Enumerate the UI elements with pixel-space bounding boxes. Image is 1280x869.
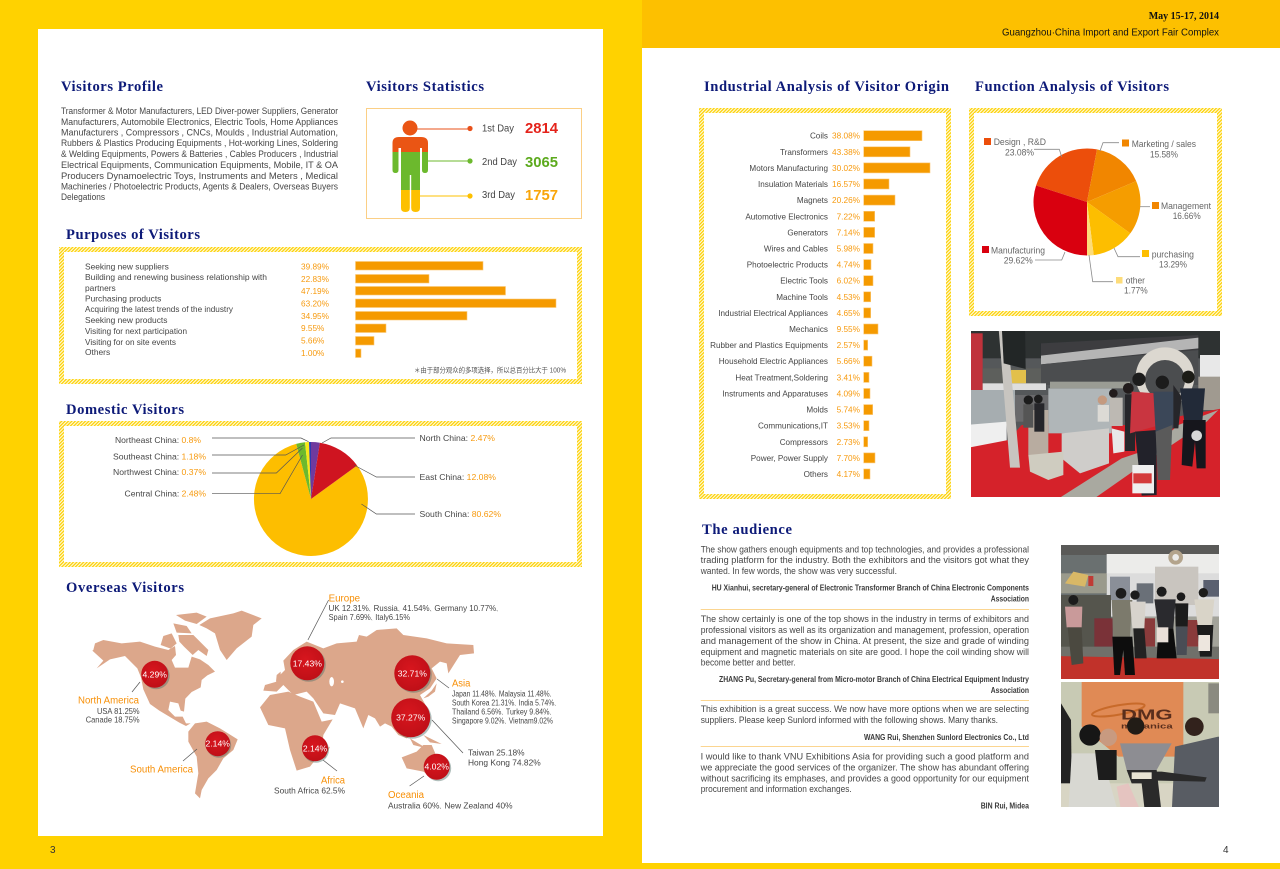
text block: visitors profile: Rubbers & Plastics Producing Equipments , Hot-working Lines, Soldering [61, 138, 338, 148]
panel: domestic visitors [62, 424, 580, 564]
testimonial: WANG Rui: WANG Rui, Shenzhen Sunlord Electronics Co., Ltd [864, 732, 1029, 742]
testimonial: BIN Rui: I would like to thank VNU Exhibitions Asia for providing such a good platform and [701, 752, 1029, 762]
text block: visitors profile: & Welding Equipments, Powers & Batteries , Cables Producers , Industrial [61, 149, 338, 159]
purpose labels: Seeking new products [85, 315, 167, 325]
industry percentages: 4.74% [837, 261, 861, 270]
day 2 row [428, 154, 558, 171]
purpose labels: partners [85, 283, 116, 293]
text block: visitors profile [61, 106, 338, 202]
day 1 row [417, 120, 559, 137]
label: North America: North America [78, 696, 139, 706]
label: Europe: Spain 7.69%、Italy6.15% [329, 612, 411, 622]
industry labels: Instruments and Apparatuses [722, 390, 828, 398]
industry labels: Magnets [797, 196, 828, 205]
legend: Marketing sales: 15.58% [1150, 149, 1178, 159]
day 1 row: 2814 [525, 120, 559, 137]
photo: DMG mecanica meeting [1061, 682, 1219, 807]
testimonial: BIN Rui: we appreciate the good services of the organizer. The show has abundant offering [700, 762, 1029, 772]
heading: Domestic Visitors: Domestic Visitors [66, 402, 184, 418]
testimonial: ZHANG Pu: Association [991, 685, 1029, 695]
purpose percentages: 1.00% [301, 349, 325, 358]
testimonial: BIN Rui: procurement and information exchanges. [701, 784, 852, 794]
label: Asia: Thailand 6.56%、Turkey 9.84%、 [452, 707, 554, 716]
legend: Management [1152, 201, 1211, 221]
industry percentages: 20.26% [832, 196, 861, 205]
legend: Design R&D [984, 137, 1046, 157]
industry percentages: 43.38% [832, 148, 861, 157]
legend: Management: 16.66% [1173, 211, 1201, 221]
legend: other: other [1126, 275, 1145, 285]
testimonial: BIN Rui [700, 752, 1029, 811]
right page header band: May 15-17, 2014 [1149, 11, 1219, 22]
testimonial: BIN Rui: without sacrificing its emphases, and provides a good opportunity for our equipment [700, 773, 1029, 783]
testimonial: WANG Rui: This exhibition is a great success. We now have more options when we are selecting [701, 704, 1029, 714]
domestic labels: Southeast China: 1.18% [113, 452, 207, 462]
right page background [642, 0, 1280, 869]
purpose labels: Acquiring the latest trends of the industry [85, 304, 234, 314]
industry labels: Communications,IT [758, 422, 828, 431]
legend: Manufacturing [982, 245, 1045, 265]
legend: Design R&D: Design , R&D [994, 137, 1046, 147]
purpose percentages: 47.19% [301, 287, 330, 296]
domestic labels [113, 433, 502, 519]
day 3 row [420, 187, 558, 204]
purpose labels [85, 262, 267, 357]
industry percentages: 7.70% [837, 454, 861, 463]
right page header band [642, 0, 1280, 48]
purpose percentages: 34.95% [301, 312, 330, 321]
testimonial: ZHANG Pu: equipment and magnetic materials on site are good. I hope the coil winding show will [701, 647, 1029, 657]
industry labels [710, 132, 829, 479]
footnote: ＊由于部分观众的多项选择，所以总百分比大于 100% [414, 366, 566, 374]
text block: visitors profile: Machineries / Photoelectric Products, Agents & Dealers, Overseas Buyers [61, 182, 338, 192]
industry labels: Rubber and Plastics Equipments [710, 341, 828, 350]
industry labels: Compressors [780, 438, 828, 447]
photo: DMG mecanica meeting: mecanica [1121, 722, 1174, 731]
label: South America: South America [130, 764, 193, 776]
industry labels: Household Electric Appliances [719, 357, 828, 366]
domestic labels: Northeast China: 0.8% [115, 435, 202, 445]
industry percentages: 5.98% [837, 244, 861, 254]
label: Africa: South Africa 62.5% [274, 786, 346, 796]
map bubble: Oceania [424, 754, 451, 781]
label: Europe: UK 12.31%、Russia、41.54%、Germany 10.77%、 [329, 603, 501, 613]
label: North America: USA 81.25% [97, 706, 140, 716]
testimonial: HU Xianhui: Association [991, 593, 1029, 603]
leader lines: domestic [212, 438, 415, 514]
text block: visitors profile: Producers Dynamoelectric Toys, Instruments and Meters , Medical [61, 171, 338, 181]
industry percentages: 38.08% [832, 132, 861, 141]
industry percentages: 5.74% [837, 406, 861, 415]
domestic labels: Northwest China: 0.37% [113, 467, 207, 477]
industry percentages: 3.53% [837, 422, 861, 431]
testimonial: WANG Rui [701, 704, 1029, 746]
legend: Manufacturing: Manufacturing [991, 245, 1045, 255]
world map [92, 611, 474, 798]
industry labels: Motors Manufacturing [749, 164, 828, 173]
purpose labels: Purchasing products [85, 294, 161, 304]
panel: function analysis [972, 110, 1220, 314]
industry labels: Transformers [780, 148, 828, 157]
heading: Industrial Analysis of Visitor Origin: Industrial Analysis of Visitor Origin [704, 79, 949, 95]
text block: visitors profile: Manufacturers , Compressors , CNCs, Moulds , Industrial Automation, [61, 128, 338, 138]
heading: Purposes of Visitors: Purposes of Visitors [66, 227, 200, 243]
purpose percentages: 5.66% [301, 337, 325, 346]
domestic labels: Central China: 2.48% [124, 488, 207, 498]
label: Taiwan and Hong Kong [468, 747, 541, 767]
page number 3: 3 [50, 845, 56, 856]
map bubble: Europe: 17.43% [293, 658, 322, 668]
purpose labels: Visiting for on site events [85, 337, 176, 347]
industry labels: Heat Treatment,Soldering [735, 373, 828, 382]
industry labels: Photoelectric Products [747, 261, 828, 270]
legend: other [1116, 275, 1148, 295]
legend: purchasing: purchasing [1152, 249, 1194, 259]
industry percentages [832, 132, 861, 479]
panel: purposes of visitors [62, 250, 580, 382]
industry labels: Generators [787, 228, 828, 237]
label: Asia: Japan 11.48%、Malaysia 11.48%、 [452, 689, 554, 698]
testimonial: ZHANG Pu: The show certainly is one of the top shows in the industry in terms of exhibitors and [701, 614, 1029, 624]
map bubble: Asia north: 32.71% [398, 668, 427, 678]
heading: Visitors Statistics: Visitors Statistics [366, 79, 484, 95]
page number 4: 4 [1223, 845, 1229, 856]
industry percentages: 7.14% [837, 228, 861, 237]
label: Africa: Africa [321, 776, 345, 786]
map bubble: North America [141, 661, 170, 689]
label: Taiwan and Hong Kong: Hong Kong 74.82% [468, 757, 541, 767]
photo: exhibition booth with visitors [971, 331, 1220, 497]
heading: Function Analysis of Visitors: Function Analysis of Visitors [975, 79, 1169, 95]
industry percentages: 9.55% [837, 325, 861, 334]
label: Oceania: Oceania [388, 790, 424, 801]
testimonial: HU Xianhui: HU Xianhui, secretary-general of Electronic Transformer Branch of China Electronic Components [712, 583, 1029, 593]
industry percentages: 16.57% [832, 180, 861, 189]
purpose labels: Visiting for next participation [85, 326, 187, 336]
label: Asia: Singapore 9.02%、Vietnam9.02% [452, 716, 553, 725]
purpose percentages: 22.83% [301, 275, 330, 284]
bar chart: industries [864, 131, 930, 479]
heading: Visitors Profile: Visitors Profile [61, 79, 164, 95]
legend: Marketing sales [1122, 139, 1196, 159]
label: Taiwan and Hong Kong: Taiwan 25.18% [468, 747, 525, 757]
leader lines: functions [1034, 143, 1150, 282]
testimonial: HU Xianhui [700, 545, 1029, 610]
industry labels: Automotive Electronics [745, 212, 828, 221]
map bubble: South America [205, 731, 231, 758]
label: Asia: South Korea 21.31%、India 5.74%、 [452, 698, 559, 707]
industry labels: Wires and Cables [764, 244, 828, 254]
industry percentages: 4.17% [837, 470, 861, 479]
label: Europe: Europe [329, 594, 361, 604]
map leader lines [132, 600, 463, 786]
industry labels: Molds [806, 406, 828, 415]
industry labels: Power, Power Supply [751, 454, 829, 463]
panel: visitors statistics [366, 108, 582, 218]
industry labels: Coils [810, 132, 828, 141]
legend: purchasing [1142, 249, 1194, 269]
domestic labels: South China: 80.62% [420, 509, 502, 519]
label: Asia [452, 678, 559, 725]
industry percentages: 7.22% [837, 212, 861, 221]
text block: visitors profile: Electrical Equipments, Communication Equipments, Mobile, IT & OA [61, 160, 338, 170]
purpose labels: Seeking new suppliers [85, 262, 169, 272]
label: Asia: Asia [452, 678, 471, 690]
testimonial: ZHANG Pu: professional visitors as well as its organization and management, profession, operation [701, 625, 1029, 635]
label: Africa [274, 776, 346, 796]
domestic labels: North China: 2.47% [420, 433, 496, 443]
testimonial: BIN Rui: BIN Rui, Midea [981, 801, 1029, 811]
testimonial: ZHANG Pu: and management of the show in China. At present, the size and grade of winding [701, 636, 1029, 646]
industry labels: Insulation Materials [758, 180, 828, 189]
label: North America: Canade 18.75% [86, 715, 140, 725]
day 1 row: 1st Day [482, 124, 514, 134]
map bubble: North America: 4.29% [143, 669, 167, 679]
legend: Manufacturing: 29.62% [1004, 255, 1033, 265]
testimonial: ZHANG Pu: ZHANG Pu, Secretary-general from Micro-motor Branch of China Electrical Equipment Industry [719, 674, 1029, 684]
label: North America [78, 696, 140, 725]
text block: visitors profile: Transformer & Motor Manufacturers, LED Diver-power Suppliers, Generator [61, 106, 338, 116]
day 2 row: 2nd Day [482, 157, 517, 168]
industry percentages: 4.65% [837, 309, 861, 318]
industry labels: Others [804, 470, 828, 479]
industry percentages: 4.53% [837, 293, 861, 302]
map bubble: Oceania: 4.02% [425, 762, 449, 772]
purpose labels: Others [85, 347, 110, 357]
map bubble: Asia south [391, 698, 432, 739]
purpose percentages: 9.55% [301, 324, 325, 333]
industry labels: Industrial Electrical Appliances [718, 309, 828, 318]
right page header band: Guangzhou·China Import and Export Fair Complex [1002, 28, 1219, 38]
industry percentages: 30.02% [832, 164, 861, 173]
text block: audience testimonials [700, 545, 1029, 811]
legend: Design R&D: 23.08% [1005, 147, 1034, 157]
purpose percentages: 63.20% [301, 300, 330, 309]
testimonial: ZHANG Pu [701, 614, 1029, 700]
industry percentages: 6.02% [837, 277, 861, 286]
legend: Management: Management [1161, 201, 1211, 211]
testimonial: WANG Rui: suppliers. Please keep Sunlord informed with the following shows. Many thanks. [701, 715, 998, 725]
industry percentages: 3.41% [837, 373, 861, 382]
purpose labels: Building and renewing business relationship with [85, 272, 267, 282]
pie chart: domestic regions [254, 442, 368, 556]
industry percentages: 2.57% [837, 341, 861, 350]
industry percentages: 2.73% [837, 438, 861, 447]
industry labels: Machine Tools [776, 293, 828, 302]
legend: other: 1.77% [1124, 285, 1148, 295]
industry labels: Electric Tools [780, 277, 828, 286]
left page background [0, 0, 642, 869]
left page white panel [38, 29, 603, 836]
purpose percentages [301, 262, 330, 358]
icon: person figure coloured by day [392, 120, 428, 212]
pie chart: functions [1033, 148, 1140, 256]
text block: visitors profile: Delegations [61, 192, 105, 202]
day 3 row: 3rd Day [482, 190, 515, 201]
industry percentages: 5.66% [837, 357, 861, 366]
label: Europe [329, 594, 501, 622]
legend: purchasing: 13.29% [1159, 259, 1187, 269]
map bubble: Africa [302, 735, 329, 763]
testimonial: HU Xianhui: trading platform for the industry. Both the exhibitors and the visitors got what they [701, 555, 1029, 565]
photo: DMG mecanica meeting: DMG [1121, 707, 1173, 723]
day 2 row: 3065 [525, 154, 558, 171]
map bubble: Asia south: 37.27% [396, 713, 426, 723]
bar chart: purposes [356, 262, 556, 358]
right page bottom stripe [642, 863, 1280, 869]
heading: The audience: The audience [702, 522, 793, 538]
day 3 row: 1757 [525, 187, 558, 204]
photo: visitors at V&C GmbH booth [1061, 545, 1219, 679]
industry percentages: 4.09% [837, 390, 861, 398]
map bubble: Europe [290, 646, 326, 682]
heading: Overseas Visitors: Overseas Visitors [66, 580, 184, 596]
label: Oceania [388, 790, 513, 811]
map bubble: South America: 2.14% [206, 739, 230, 749]
testimonial: ZHANG Pu: become better and better. [701, 658, 796, 668]
testimonial: HU Xianhui: wanted. In few words, the show was very successful. [700, 566, 897, 576]
testimonial: HU Xianhui: The show gathers enough equipments and top technologies, and provides a professional [701, 545, 1029, 555]
legend: Marketing sales: Marketing / sales [1132, 139, 1196, 149]
domestic labels: East China: 12.08% [420, 472, 497, 482]
label: Oceania: Australia 60%、New Zealand 40% [388, 801, 513, 811]
map bubble: Asia north [394, 655, 432, 693]
purpose percentages: 39.89% [301, 262, 330, 272]
panel: industrial analysis [702, 110, 948, 496]
map bubble: Africa: 2.14% [303, 743, 328, 753]
industry labels: Mechanics [789, 325, 828, 334]
text block: visitors profile: Manufacturers, Automobile Electronics, Electric Tools, Home Appliances [61, 117, 338, 127]
